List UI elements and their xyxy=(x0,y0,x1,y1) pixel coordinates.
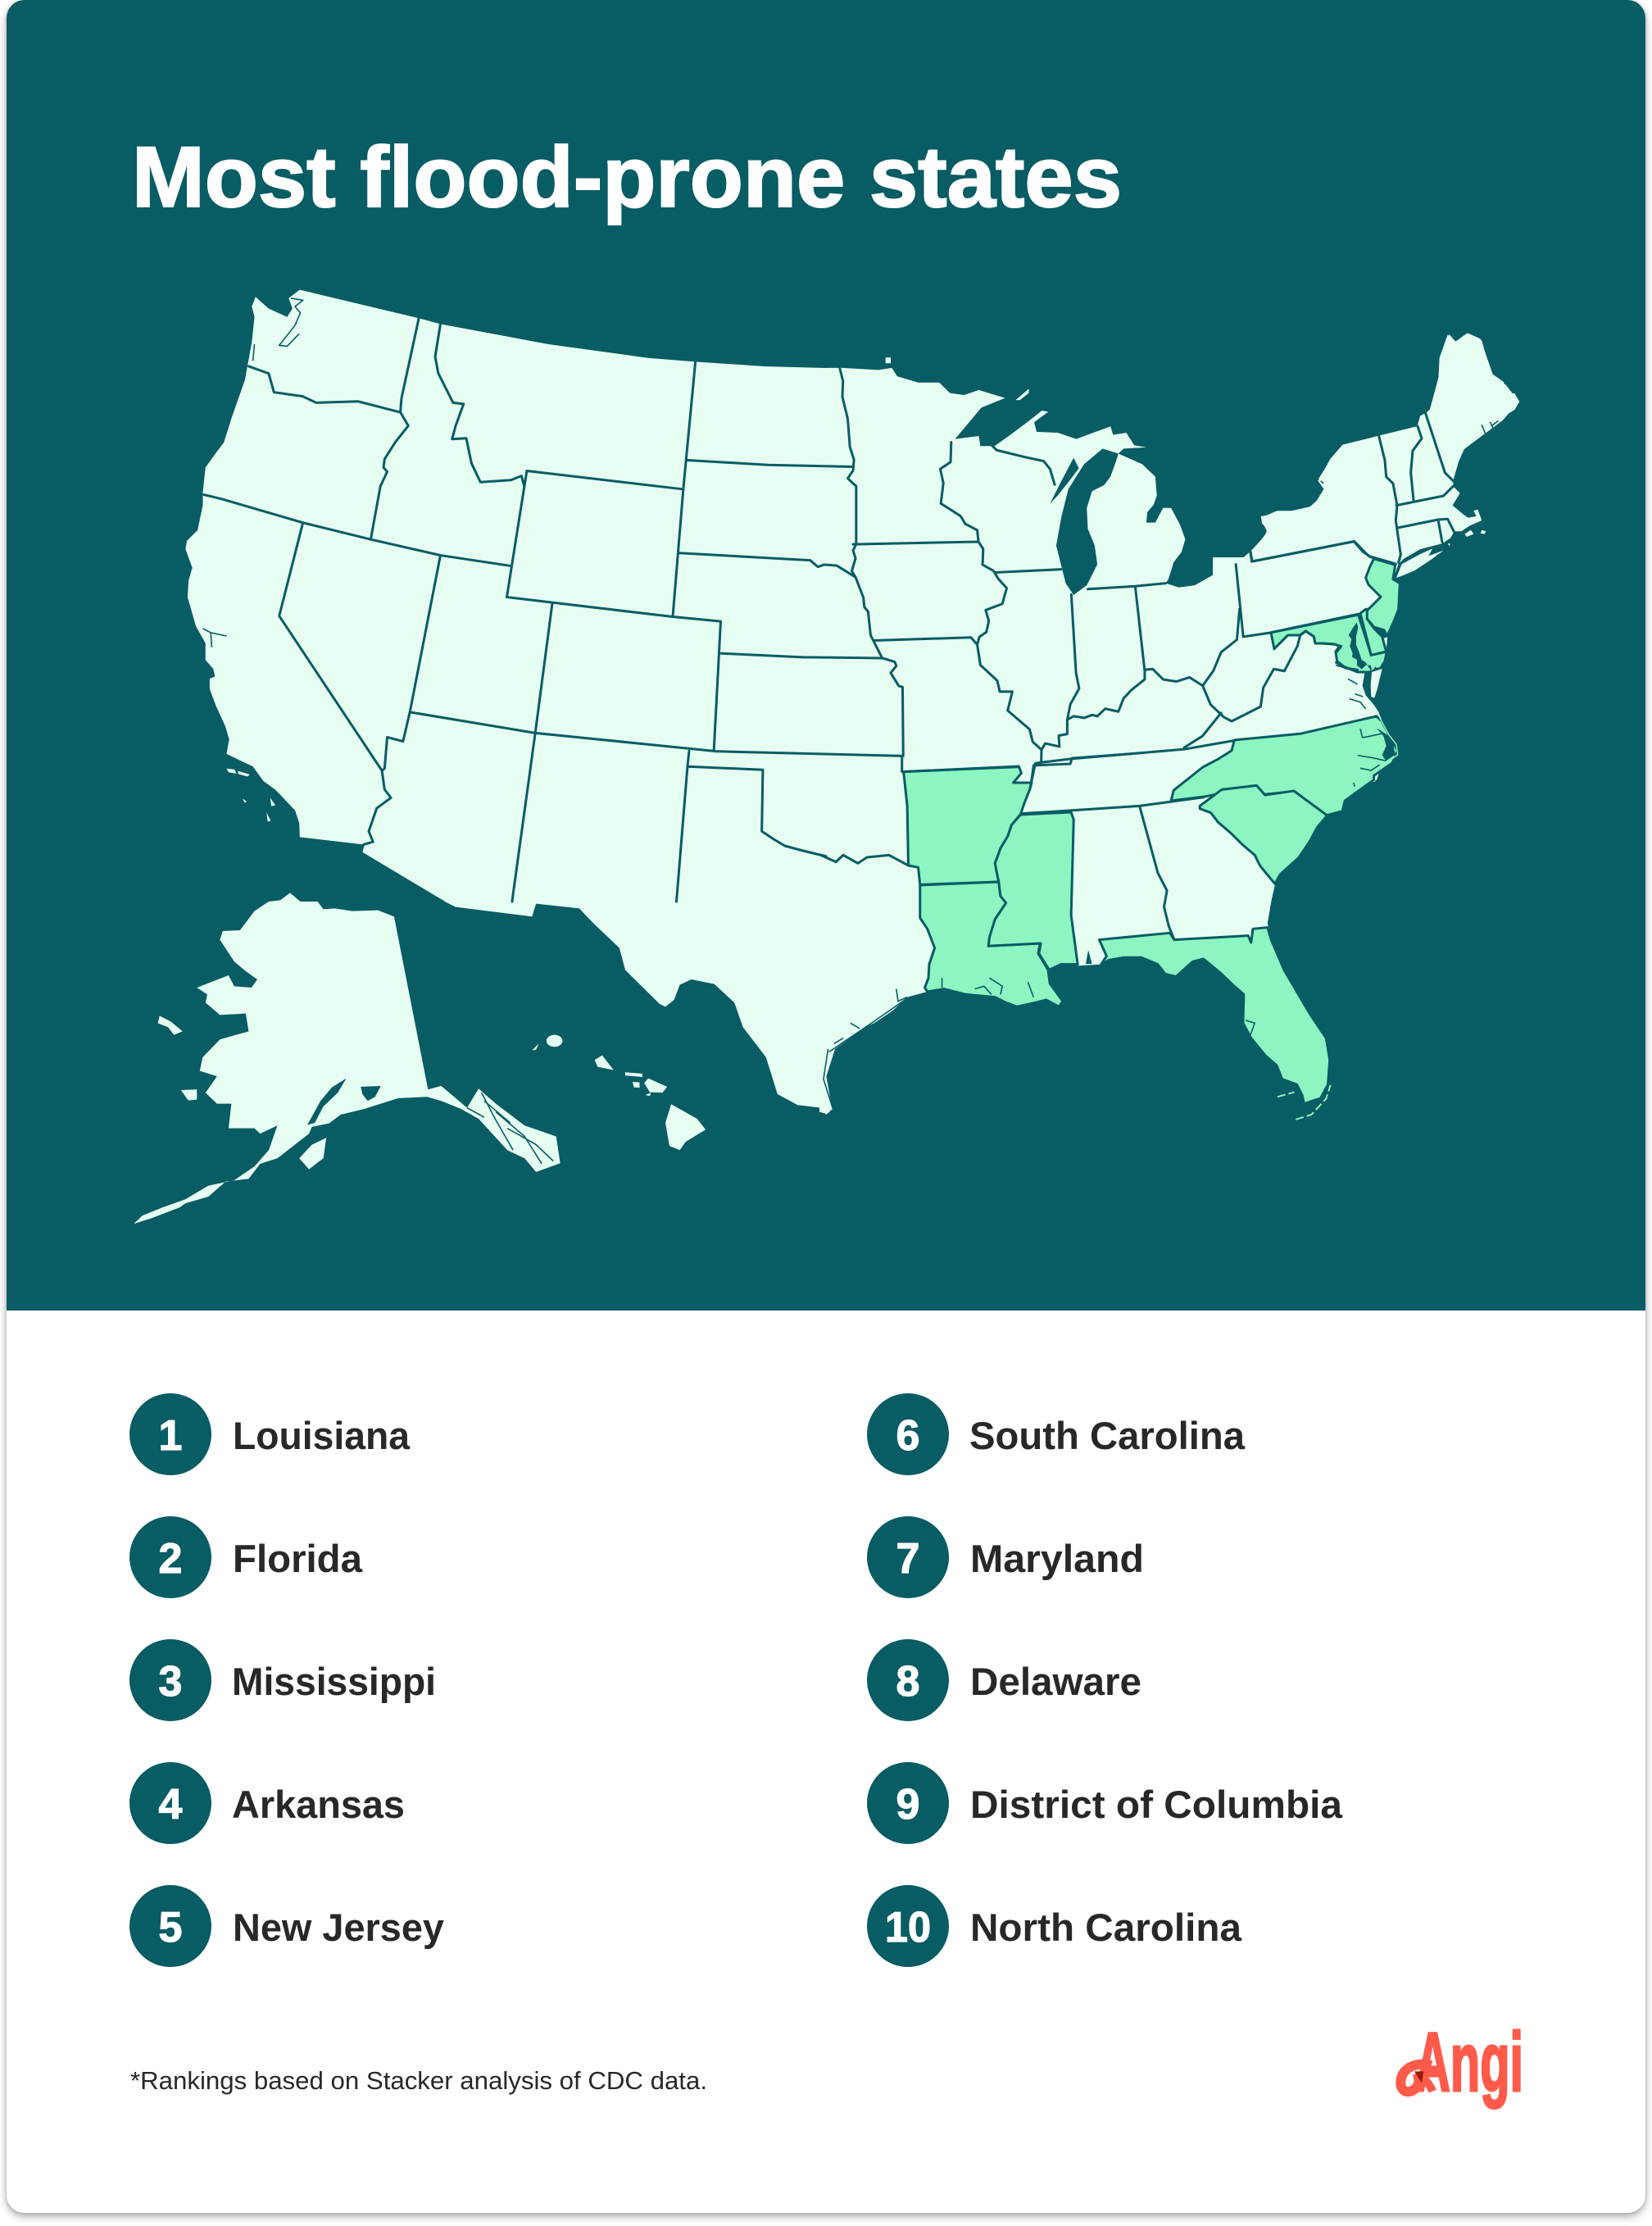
icon: Alaska xyxy=(134,893,560,1224)
item 4 Arkansas xyxy=(129,1762,405,1844)
item 3 Mississippi: Mississippi xyxy=(232,1660,436,1703)
ranked list xyxy=(129,1393,1343,1967)
land: Great Lakes and eastern states xyxy=(826,334,1518,771)
item 7 Maryland xyxy=(867,1516,1144,1598)
title: Most flood-prone states xyxy=(132,129,1122,225)
item 4 Arkansas: 4 xyxy=(159,1781,183,1828)
logo: Angi xyxy=(1400,2015,1523,2109)
item 2 Florida: Florida xyxy=(233,1537,363,1580)
item 6 South Carolina: 6 xyxy=(896,1412,919,1460)
item 8 Delaware xyxy=(867,1639,1141,1721)
Alaska panhandle channels xyxy=(467,1093,553,1164)
land: mid-Atlantic coast xyxy=(1213,557,1400,836)
South Carolina xyxy=(1200,785,1328,884)
water: Great Lakes xyxy=(1050,448,1119,595)
logo: Angi: Angi xyxy=(1415,2015,1523,2109)
item 3 Mississippi: 3 xyxy=(159,1658,182,1706)
state borders: east xyxy=(1037,542,1395,763)
item 2 Florida xyxy=(129,1516,363,1598)
item 1 Louisiana xyxy=(129,1393,411,1475)
teal header panel xyxy=(7,0,1645,1311)
item 10 North Carolina xyxy=(867,1885,1242,1967)
North Carolina xyxy=(1171,716,1398,815)
land: western states xyxy=(185,290,826,902)
item 1 Louisiana: 1 xyxy=(159,1412,182,1460)
item 7 Maryland: 7 xyxy=(896,1535,919,1583)
map of the United States xyxy=(134,290,1519,1224)
state borders: northeast xyxy=(1250,412,1456,564)
item 6 South Carolina: South Carolina xyxy=(969,1414,1246,1457)
flood-prone states highlighted xyxy=(904,559,1400,1104)
Alaska inlets xyxy=(307,1079,381,1125)
item 4 Arkansas: Arkansas xyxy=(232,1783,405,1826)
item 5 New Jersey: New Jersey xyxy=(233,1906,444,1949)
item 9 District of Columbia: District of Columbia xyxy=(970,1783,1343,1826)
item 7 Maryland: Maryland xyxy=(970,1537,1144,1580)
icon: Hawaii xyxy=(532,1035,706,1150)
item 5 New Jersey xyxy=(129,1885,444,1967)
item 2 Florida: 2 xyxy=(159,1535,182,1583)
land: southern states xyxy=(819,754,1376,1114)
Arkansas, Louisiana, Mississippi, Florida xyxy=(904,766,1330,1104)
water: Chesapeake and Delaware bays, sounds xyxy=(1336,622,1398,787)
item 10 North Carolina: North Carolina xyxy=(970,1906,1242,1949)
land: New England and New York xyxy=(1229,334,1519,647)
New Jersey, Delaware, Maryland and District of Columbia xyxy=(1271,559,1400,672)
item 9 District of Columbia xyxy=(867,1762,1343,1844)
state borders: West Virginia and Virginia against Maryland xyxy=(1274,631,1340,652)
item 9 District of Columbia: 9 xyxy=(896,1781,919,1828)
footnote: *Rankings based on Stacker analysis of CDC data. xyxy=(130,2066,707,2095)
item 1 Louisiana: Louisiana xyxy=(233,1414,411,1457)
Texas coast lagoon xyxy=(824,998,907,1106)
item 3 Mississippi xyxy=(129,1639,436,1721)
item 6 South Carolina xyxy=(867,1393,1246,1475)
item 8 Delaware: 8 xyxy=(896,1658,919,1706)
land: Texas and the southwest, Alaska and Hawaii xyxy=(134,861,933,1224)
item 10 North Carolina: 10 xyxy=(885,1904,931,1951)
item 5 New Jersey: 5 xyxy=(159,1904,182,1951)
item 8 Delaware: Delaware xyxy=(970,1660,1141,1703)
state borders: west xyxy=(204,318,826,902)
state borders: south xyxy=(819,764,1331,1120)
state borders: central xyxy=(679,369,1131,783)
